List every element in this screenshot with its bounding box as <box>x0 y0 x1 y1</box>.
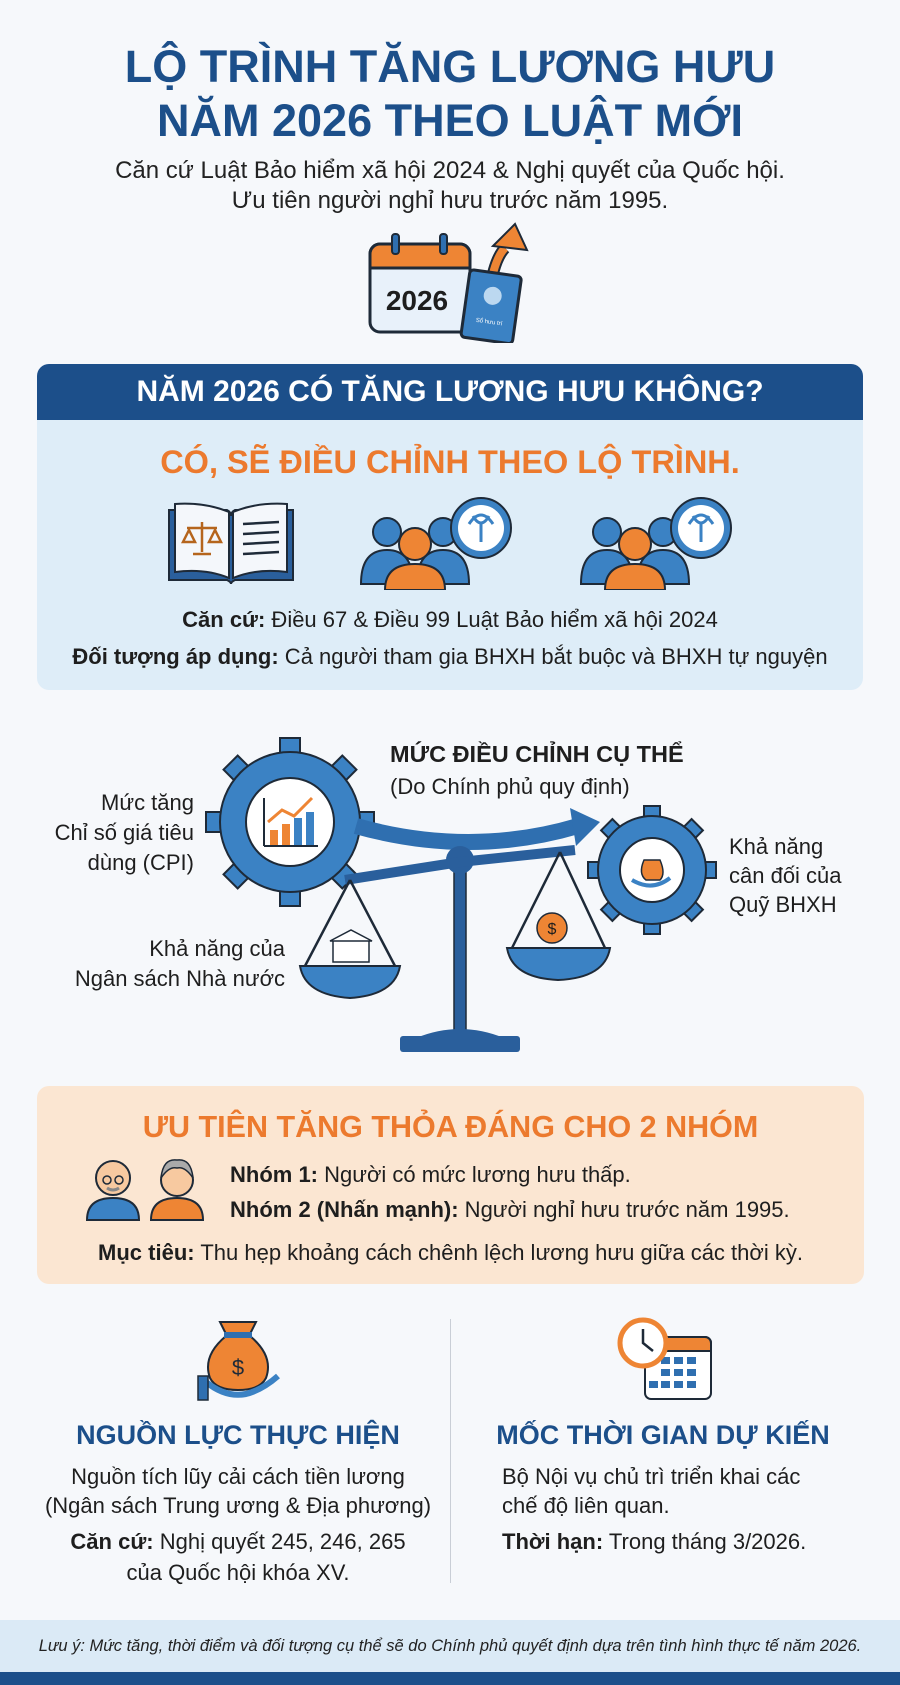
icon: elderly couple <box>86 1159 204 1221</box>
text: objective: Mục tiêu: Thu hẹp khoảng cách chênh lệch lương hưu giữa các thời kỳ. <box>98 1240 803 1265</box>
label: state budget: Ngân sách Nhà nước <box>75 966 285 991</box>
title: LỘ TRÌNH TĂNG LƯƠNG HƯU <box>125 41 775 92</box>
text <box>502 1464 800 1518</box>
header bar: NĂM 2026 CÓ TĂNG LƯƠNG HƯU KHÔNG? <box>136 375 764 408</box>
icon: law book <box>168 502 294 584</box>
heading: ƯU TIÊN TĂNG THỎA ĐÁNG CHO 2 NHÓM <box>143 1110 758 1144</box>
label: CPI: Chỉ số giá tiêu <box>55 820 194 845</box>
footer note <box>0 1620 900 1672</box>
label: social insurance fund: cân đối của <box>729 863 842 888</box>
subtitle: Ưu tiên người nghỉ hưu trước năm 1995. <box>232 187 668 214</box>
text: legal basis and subjects <box>72 607 828 669</box>
answer heading: CÓ, SẼ ĐIỀU CHỈNH THEO LỘ TRÌNH. <box>160 444 740 480</box>
panel: priority groups <box>37 1086 864 1284</box>
panel: question card <box>37 364 863 690</box>
text: groups <box>230 1162 790 1222</box>
title <box>125 41 775 146</box>
scale <box>454 860 466 1035</box>
panel: timeline <box>496 1318 830 1554</box>
heading: specific adjustment level: MỨC ĐIỀU CHỈNH CỤ THỂ <box>390 741 684 767</box>
text: (Ngân sách Trung ương & Địa phương) <box>45 1493 431 1518</box>
icon: money bag in hand <box>197 1321 280 1401</box>
heading: NGUỒN LỰC THỰC HIỆN <box>76 1420 400 1450</box>
heading: specific adjustment level: (Do Chính phủ quy định) <box>390 774 630 799</box>
icon: people with social insurance logo 2 <box>580 497 732 590</box>
label: state budget: Khả năng của <box>149 936 285 961</box>
text: legal basis and subjects: Đối tượng áp dụng: Cả người tham gia BHXH bắt buộc và BHXH tự nguyện <box>72 644 828 669</box>
panel: resources <box>45 1321 431 1585</box>
label: state budget <box>75 936 285 991</box>
chart: adjustment factors scale diagram <box>205 737 717 1052</box>
label: CPI: Mức tăng <box>101 790 194 815</box>
text <box>45 1464 431 1518</box>
icon: calendar 2026 with pension book and arrow <box>368 222 529 343</box>
heading: specific adjustment level <box>390 741 684 799</box>
subtitle <box>115 157 785 214</box>
text: Bộ Nội vụ chủ trì triển khai các <box>502 1464 800 1489</box>
arrow <box>356 826 578 842</box>
text: groups: Nhóm 1: Người có mức lương hưu thấp. <box>230 1162 631 1187</box>
label: social insurance fund <box>729 834 842 917</box>
panel: timeline: Thời hạn: Trong tháng 3/2026. <box>502 1529 806 1554</box>
left gear <box>206 738 374 906</box>
right gear <box>588 806 716 934</box>
icon: calendar 2026 with pension book and arrow: Sổ hưu trí <box>475 317 503 327</box>
icon: money bag in hand: $ <box>232 1355 244 1380</box>
footer note: Lưu ý: Mức tăng, thời điểm và đối tượng cụ thể sẽ do Chính phủ quyết định dựa trên tình hình thực tế năm 2026. <box>39 1637 861 1655</box>
chart: adjustment factors scale diagram: $ <box>548 921 557 938</box>
icon: people with social insurance logo 1 <box>360 497 512 590</box>
panel: resources: Căn cứ: Nghị quyết 245, 246, 265 <box>70 1529 406 1554</box>
icon: calendar 2026 with pension book and arrow: 2026 <box>386 285 448 316</box>
label: CPI <box>55 790 194 875</box>
header bar <box>37 364 863 420</box>
text: chế độ liên quan. <box>502 1493 670 1518</box>
text: legal basis and subjects: Căn cứ: Điều 67 & Điều 99 Luật Bảo hiểm xã hội 2024 <box>182 607 718 632</box>
subtitle: Căn cứ Luật Bảo hiểm xã hội 2024 & Nghị quyết của Quốc hội. <box>115 157 785 184</box>
label: social insurance fund: Khả năng <box>729 834 823 859</box>
label: CPI: dùng (CPI) <box>88 850 194 875</box>
panel: resources: của Quốc hội khóa XV. <box>126 1560 350 1585</box>
text: groups: Nhóm 2 (Nhấn mạnh): Người nghỉ hưu trước năm 1995. <box>230 1197 790 1222</box>
title: NĂM 2026 THEO LUẬT MỚI <box>157 95 743 146</box>
label: social insurance fund: Quỹ BHXH <box>729 892 837 917</box>
icon: clock and calendar <box>618 1318 712 1400</box>
heading: MỐC THỜI GIAN DỰ KIẾN <box>496 1420 830 1450</box>
text: Nguồn tích lũy cải cách tiền lương <box>71 1464 405 1489</box>
